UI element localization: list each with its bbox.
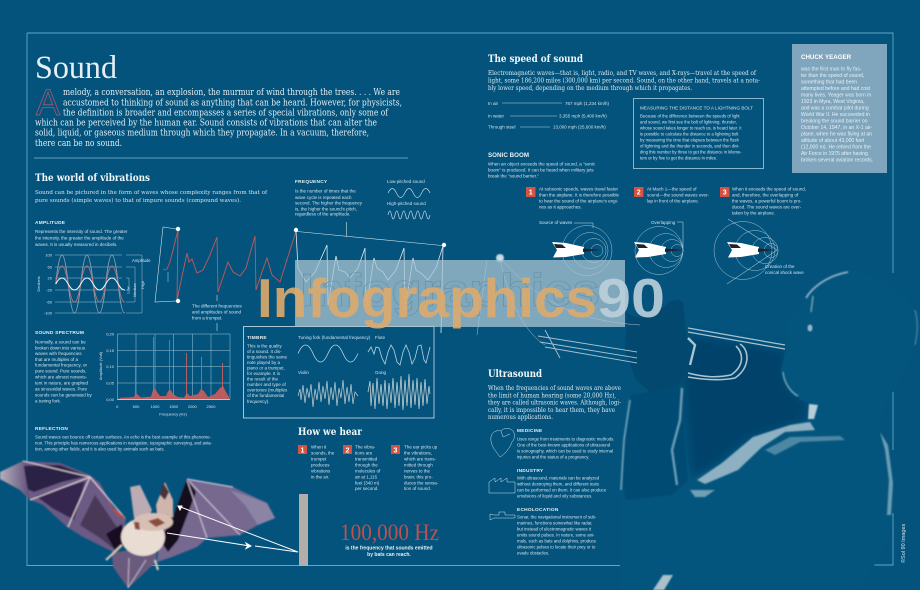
spectrum text: sounds can be generated by: [35, 392, 93, 398]
timbre text: piano or a trumpet,: [247, 366, 285, 370]
sonic step 1: 1: [529, 190, 533, 196]
flute wave: Flute: [375, 335, 386, 340]
intro paragraph: which can be perceived by the human ear. Sound consists of vibrations that can alter the: [35, 118, 377, 128]
sonic step 2: 2: [637, 190, 641, 196]
echolocation: evade obstacles.: [517, 550, 549, 556]
spectrum bar chart: 1000: [151, 404, 160, 409]
panel: Chuck Yeager: many lives. Yeager was born in: [801, 92, 871, 98]
panel: Chuck Yeager: was the first man to fly fas-: [801, 66, 862, 72]
sonic step 3: 3: [723, 190, 727, 196]
sonic boom text: When an object exceeds the speed of sound, a "sonic: [488, 162, 596, 166]
sonic step 3: and, therefore, the overlapping of: [732, 192, 799, 198]
panel: amplitude: [35, 220, 151, 316]
step 1: vibrations: [311, 468, 331, 474]
step 2: per second.: [355, 486, 379, 491]
icon: factory: [489, 478, 515, 493]
frequency text: wave cycle is repeated each: [295, 195, 352, 200]
amplitude chart: -20: [46, 288, 53, 292]
timbre text: TIMBRE: [247, 335, 267, 341]
frequency text: Is the number of times that the: [295, 188, 356, 194]
speed table: In water: [488, 114, 505, 118]
step 3: brain; this pro-: [404, 474, 433, 480]
industry: [489, 468, 607, 498]
hand: [625, 300, 690, 392]
spectrum text: broken down into various: [35, 346, 86, 350]
tuning fork wave: Tuning fork (fundamental frequency): [298, 335, 371, 340]
sonic step 3: taken by the airplane.: [732, 210, 775, 216]
spectrum text: pure sound. Pure sounds,: [35, 368, 87, 374]
step 2: [343, 444, 381, 491]
speed table: [488, 101, 610, 130]
spectrum text: a tuning fork.: [35, 398, 61, 404]
drop cap: A: [36, 82, 60, 123]
tuning fork wave: [298, 335, 371, 362]
echolocation: but instead of electromagnetic waves it: [517, 526, 592, 532]
speed table: Through steel: [488, 124, 516, 130]
trumpet wave caption: The different frequencies: [192, 304, 242, 308]
step 1: [298, 444, 335, 480]
frequency text: regardless of the amplitude.: [295, 212, 351, 216]
panel: Chuck Yeager: Air Force in 1975 after having: [801, 151, 868, 157]
diagram: subsonic plane: [539, 220, 612, 276]
medicine: [491, 428, 614, 460]
amplitude chart: 20: [48, 276, 53, 280]
box: lightning bolt distance: ters or by five to get the distance in miles.: [640, 156, 717, 160]
box: lightning bolt distance: Because of the difference between the speeds of light: [640, 114, 740, 118]
sonic step 2: sound—the sound waves over-: [647, 192, 710, 198]
diagram: subsonic plane: Source of waves: [539, 220, 573, 225]
sonic step 3: [720, 186, 806, 216]
trumpet wave caption: [192, 295, 242, 331]
neck highlight: [808, 404, 818, 419]
panel: Chuck Yeager: ter than the speed of sound,: [801, 73, 864, 79]
echolocation: marines, functions somewhat like radar,: [517, 520, 592, 526]
amplitude chart: -60: [46, 300, 53, 304]
panel: ultrasound: [488, 368, 621, 556]
medicine: One of the best-known applications of ultrasound: [517, 442, 611, 448]
spectrum bar chart: 1500: [169, 404, 179, 409]
box: lightning bolt distance: [634, 98, 764, 168]
panel: Chuck Yeager: [792, 44, 887, 173]
step 1: 1: [301, 448, 305, 454]
spectrum text: which are almost nonexis-: [35, 374, 88, 380]
frequency text: second. The higher the frequency: [295, 200, 363, 206]
sonic step 2: [634, 186, 710, 204]
flute wave: [368, 335, 430, 365]
intro paragraph: accustomed to thinking of sound as anything that can be heard. However, for physicists,: [63, 98, 402, 108]
timbre text: of the fundamental: [247, 393, 284, 398]
spectrum text: that are multiples of a: [35, 357, 79, 362]
spectrum bar chart: 2500: [207, 404, 216, 409]
trumpet: [477, 258, 785, 380]
step 3: tion of sound.: [404, 486, 431, 491]
step 2: feet (340 m): [355, 480, 380, 486]
photo: trumpet player: [477, 254, 918, 590]
echolocation: Sonar, the navigational instrument of sub-: [517, 514, 597, 520]
spectrum text: Normally, a sound can be: [35, 340, 86, 344]
low-pitched wave: Low-pitched sound: [387, 179, 425, 184]
callout: 100,000 Hz: by bats can reach.: [367, 552, 411, 558]
sonic boom heading: SONIC BOOM: [488, 152, 529, 159]
sleeve highlight: [621, 388, 682, 490]
spectrum text: as sinusoidal waves. Pure: [35, 386, 88, 392]
sonic step 1: At subsonic speeds, waves travel faster: [539, 186, 619, 192]
amplitude chart: -100: [44, 310, 53, 316]
speed table: 767 mph (1,234 km/h): [565, 101, 610, 106]
box: lightning bolt distance: of lightning and the thunder in seconds, and then divi-: [640, 144, 740, 148]
amplitude chart: Medium: [133, 283, 137, 297]
ultrasound intro text: numerous applications.: [488, 413, 553, 421]
box: lightning bolt distance: whose sound takes longer to reach us, is heard later. It: [640, 126, 742, 130]
chart: trumpet sound wave: [155, 222, 446, 333]
trumpet wave caption: and amplitudes of sound: [192, 310, 242, 314]
sonic boom text: break the "sound barrier.": [488, 174, 539, 178]
heading: the world of vibrations: The world of vibrations: [35, 172, 150, 184]
step 2: through the: [355, 462, 378, 468]
spectrum bar chart: 0,05: [106, 380, 115, 386]
spectrum text: fundamental frequency, or: [35, 362, 87, 368]
shoulder highlight: [690, 422, 845, 497]
reflection text: Sound waves can bounce off certain surfaces. An echo is the best example of this phenome-: [35, 434, 212, 440]
box: lightning bolt distance: is possible to calculate the distance to a lightning bolt: [640, 132, 739, 136]
man silhouette: [620, 270, 918, 590]
diagram: supersonic plane: [714, 219, 804, 284]
step 2: air at 1,115: [355, 474, 378, 480]
echolocation: [490, 507, 597, 556]
step 1: trumpet: [311, 456, 327, 462]
intro paragraph: solid, liquid, or gaseous medium through which they propagate. In a vacuum, therefore,: [35, 129, 369, 139]
amplitude text: Represents the intensity of sound. The greater: [35, 229, 128, 234]
step 3: 3: [394, 448, 398, 454]
violin wave: [298, 370, 358, 407]
amplitude chart: 100: [45, 252, 53, 258]
timbre text: for example. It is: [247, 371, 281, 376]
amplitude chart: High: [141, 281, 145, 289]
intro paragraph: the definition is broader and encompasses a series of special vibrations, only some of: [63, 108, 389, 118]
echolocation: mals, such as bats and dolphins, produce: [517, 538, 597, 544]
sonic step 3: When it exceeds the speed of sound,: [732, 186, 806, 192]
panel: the speed of sound: [488, 53, 764, 168]
panel: frequency: [295, 179, 430, 219]
spectrum bar chart: [98, 332, 230, 416]
panel: Chuck Yeager: October 14, 1947, in an X-1 air-: [801, 125, 873, 131]
panel: Chuck Yeager: 1923 in Myra, West Virginia,: [801, 99, 865, 105]
gong wave: Gong: [375, 370, 387, 375]
sonic boom text: boom" is produced. It can be heard when military jets: [488, 168, 594, 172]
step 3: the vibrations,: [404, 450, 432, 456]
panel: Chuck Yeager: breaking the sound barrier on: [801, 118, 868, 124]
diagram: supersonic plane: Creation of the: [765, 264, 795, 269]
speed table: In air: [488, 101, 499, 106]
high-pitched wave: High-pitched sound: [387, 201, 426, 206]
timbre text: This is the quality: [247, 344, 283, 348]
panel: sound spectrum: [35, 330, 230, 416]
step 2: tions are: [355, 450, 373, 456]
callout: 100,000 Hz: [340, 520, 439, 558]
medicine: MEDICINE: [517, 428, 543, 434]
box: lightning bolt distance: and sound, we first see the bolt of lightning; thunder,: [640, 120, 737, 124]
gong wave: [368, 370, 430, 410]
speed intro text: Electromagnetic waves—that is, light, radio, and TV waves, and X-rays—travel at the speed of: [488, 69, 757, 77]
medicine: Uses range from treatments to diagnostic methods.: [517, 436, 614, 442]
sonic step 1: to hear the sound of the airplane's engi-: [539, 198, 619, 204]
title: Sound: [35, 50, 117, 86]
step 2: The vibra-: [355, 444, 376, 450]
step 3: nerves to the: [404, 468, 431, 474]
echolocation: ECHOLOCATION: [517, 507, 559, 513]
panel: how we hear: [298, 426, 439, 491]
speed intro text: light, some 186,200 miles (300,000 km) per second. Sound, on the other hand, travels at a nota-: [488, 76, 760, 84]
step 3: [391, 444, 439, 491]
medicine: is sonography, which can be used to study internal: [517, 448, 613, 454]
amplitude chart: 60: [48, 264, 53, 270]
industry: With ultrasound, materials can be analyzed: [517, 476, 600, 480]
panel: timbre: [244, 326, 434, 418]
spectrum bar chart: Amplitude (Volt): [98, 351, 103, 380]
spectrum bar chart: 0,00: [106, 397, 115, 402]
sonic step 1: than the airplane. It is therefore possible: [539, 192, 620, 198]
watermark: Infographics: [300, 264, 600, 316]
sonic step 2: lap in front of the airplane.: [647, 198, 699, 204]
speed intro text: [488, 69, 760, 92]
ultrasound intro text: they are called ultrasonic waves. Although, logi-: [488, 398, 621, 406]
step 2: 2: [346, 448, 350, 454]
icon: submarine: [490, 512, 515, 520]
timbre text: the result of the: [247, 376, 279, 382]
amplitude text: the intensity, the greater the amplitude of the: [35, 236, 124, 240]
sonic step 2: At Mach 1—the speed of: [647, 186, 697, 192]
step 1: When it: [311, 444, 327, 450]
panel: Chuck Yeager: altitude of about 43,000 feet: [801, 138, 865, 144]
step 1: sounds, the: [311, 450, 335, 456]
sonic step 1: nes as it approaches.: [539, 204, 582, 210]
speed intro text: bly lower speed, depending on the medium through which it propagates.: [488, 84, 692, 92]
amplitude text: waves. It is usually measured in decibels.: [35, 242, 118, 247]
back highlight: [880, 432, 893, 515]
speed heading: The speed of sound: [488, 53, 584, 65]
speed table: 13,000 mph (25,600 km/h): [553, 124, 606, 130]
box: lightning bolt distance: by measuring the time that elapses between the flash: [640, 138, 740, 142]
spectrum bar chart: 0,10: [106, 364, 115, 369]
frequency text: is, the higher the sound's pitch,: [295, 206, 357, 212]
amplitude chart: Amplitude: [132, 258, 151, 263]
echo arrows: [167, 506, 298, 552]
ultrasound heading: Ultrasound: [488, 368, 543, 380]
panel: Chuck Yeager: something that had been: [801, 80, 857, 86]
vibrations intro text: pure sounds (simple waves) to that of impure sounds (compound waves).: [35, 197, 241, 204]
vibrations intro text: [35, 190, 268, 204]
spectrum text: SOUND SPECTRUM: [35, 330, 84, 336]
ultrasound intro text: When the frequencies of sound waves are above: [488, 384, 621, 392]
trumpet wave caption: from a trumpet.: [192, 316, 223, 320]
industry: INDUSTRY: [517, 468, 544, 474]
box: lightning bolt distance: ding this number by three to get the distance in kilome-: [640, 150, 742, 154]
sonic step 3: the waves, a powerful boom is pro-: [732, 198, 802, 204]
amplitude chart: Low: [126, 286, 130, 293]
step 1: in the air.: [311, 474, 329, 480]
timbre text: frequency).: [247, 399, 270, 404]
timbre text: number and type of: [247, 382, 287, 387]
step 3: The ear picks up: [404, 444, 438, 450]
violin wave: Violin: [298, 370, 309, 375]
reflection text: non. This principle has numerous applications in navigation, topographic surveying, and avia-: [35, 440, 212, 446]
timbre text: overtones (multiples: [247, 388, 288, 392]
spectrum bar chart: Frequency (Hz): [159, 412, 187, 416]
intro paragraph: there can be no sound.: [35, 139, 122, 149]
frequency text: FREQUENCY: [295, 179, 328, 185]
spectrum bar chart: 0,20: [106, 332, 115, 336]
spectrum bar chart: 500: [133, 404, 140, 409]
ultrasound intro text: the limit of human hearing (some 20,000 Hz),: [488, 392, 616, 400]
callout: 100,000 Hz: 100,000 Hz: [340, 520, 439, 545]
panel: Chuck Yeager: (12,000 m). He retired from the: [801, 144, 871, 150]
watermark: 90: [597, 267, 665, 329]
intro paragraph: [35, 88, 402, 149]
reflection text: tion, among other fields, and it is also used by animals such as bats.: [35, 446, 165, 452]
amplitude text: AMPLITUDE: [35, 220, 66, 226]
how we hear heading: How we hear: [298, 426, 362, 438]
box: lightning bolt distance: MEASURING THE DISTANCE TO A LIGHTNING BOLT: [640, 106, 753, 112]
echolocation: ultrasonic pulses to locate their prey or to: [517, 544, 596, 550]
credit: ©Sol 90 Images: [900, 524, 907, 563]
vibrations intro text: Sound can be pictured in the form of waves whose complexity ranges from that of: [35, 190, 268, 196]
ultrasound intro text: [488, 384, 621, 421]
panel: Chuck Yeager: CHUCK YEAGER: [801, 54, 852, 61]
spectrum bar chart: 0,15: [106, 348, 115, 353]
spectrum bar chart: 2000: [188, 404, 198, 409]
reflecting wall: [299, 494, 308, 566]
step 1: produces: [311, 462, 330, 468]
diagram: mach 1 plane: Overlapping: [651, 220, 676, 225]
diagram: mach 1 plane: [634, 220, 683, 274]
industry: emulsions of liquid and oily substances.: [517, 494, 592, 498]
industry: can be performed on them. It can also produce: [517, 488, 607, 492]
speed table: 3,355 mph (5,400 km/h): [559, 114, 607, 118]
callout: 100,000 Hz: is the frequency that sounds emitted: [345, 546, 433, 552]
amplitude chart: [36, 252, 151, 316]
step 3: mitted through: [404, 462, 433, 468]
step 2: transmitted: [355, 456, 378, 462]
spectrum text: tent in nature, are graphed: [35, 380, 89, 386]
step 2: molecules of: [355, 468, 381, 474]
photo: bat: [0, 461, 275, 588]
timbre text: of a sound. It dis-: [247, 349, 282, 354]
reflection text: REFLECTION: [35, 426, 68, 432]
step 3: which are trans-: [404, 456, 437, 462]
spectrum bar chart: 0: [116, 404, 119, 409]
icon: heart: [491, 428, 515, 457]
panel: Chuck Yeager: attempted before and had cost: [801, 86, 871, 92]
echolocation: emits sound pulses. In nature, some ani-: [517, 532, 595, 538]
amplitude chart: Decibels: [36, 276, 41, 292]
watermark: Infographics: [257, 267, 597, 329]
spectrum text: waves with frequencies: [35, 351, 82, 356]
industry: without destroying them, and different tests: [517, 482, 599, 486]
sonic step 1: [526, 186, 620, 210]
panel: Chuck Yeager: World War II. He succeeded in: [801, 112, 870, 118]
timbre text: note played by a: [247, 360, 281, 365]
timbre text: tinguishes the same: [247, 354, 288, 360]
head highlights: [783, 272, 917, 396]
ultrasound intro text: cally, it is impossible to hear them, they have: [488, 406, 615, 414]
diagram: supersonic plane: conical shock wave: [765, 270, 804, 275]
medicine: injuries and the status of a pregnancy.: [517, 454, 589, 460]
panel: Chuck Yeager: plane, when he was flying at an: [801, 132, 872, 138]
sonic step 3: duced. The sound waves are over-: [732, 204, 802, 210]
forearm shadow: [622, 385, 688, 500]
panel: sonic boom: [488, 152, 806, 284]
step 3: duces the sensa-: [404, 480, 439, 486]
intro paragraph: melody, a conversation, an explosion, the murmur of wind through the trees. . . . We are: [63, 88, 400, 98]
panel: Chuck Yeager: broken several aviation records.: [801, 158, 873, 164]
panel: Chuck Yeager: and was a combat pilot during: [801, 106, 869, 112]
